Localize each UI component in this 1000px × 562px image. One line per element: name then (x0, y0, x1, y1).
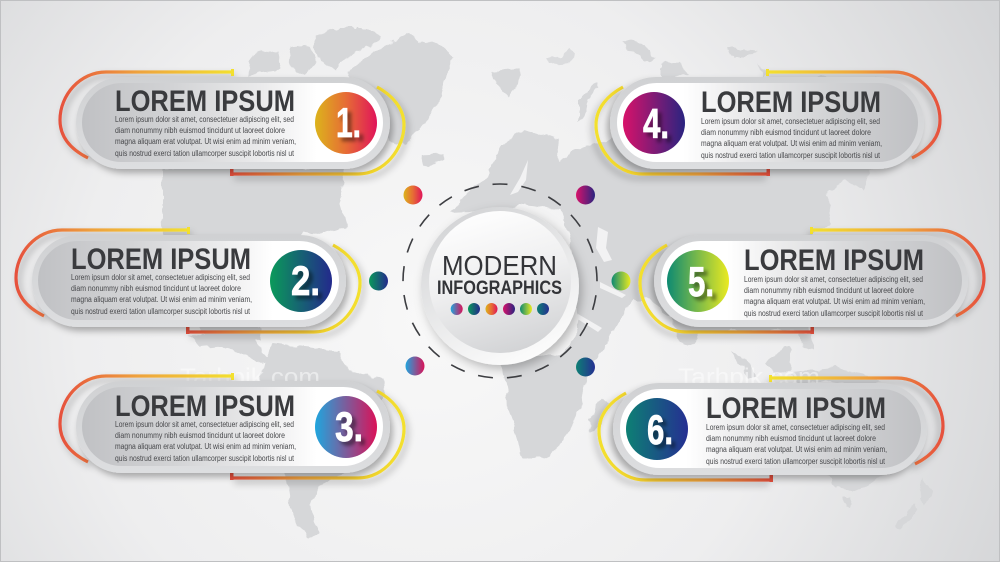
watermark right: Tarhpik.com (678, 364, 820, 391)
card 6 body text: magna aliquam erat volutpat. Ut wisi enim ad minim veniam, (706, 445, 887, 454)
map: africa (500, 300, 632, 460)
map: java and new guinea (790, 368, 880, 386)
card 4 body text: Lorem ipsum dolor sit amet, consectetuer adipiscing elit, sed (701, 117, 880, 126)
card 3 (60, 373, 404, 480)
card 2 (16, 227, 360, 334)
connector dots (369, 186, 630, 376)
world map (163, 28, 933, 537)
card 5 number badge: 5. (688, 258, 714, 305)
map: borneo (767, 346, 792, 374)
map: australia (800, 388, 905, 490)
map: central america (187, 333, 270, 362)
card 1 number badge (315, 92, 377, 154)
map: baltic sea (510, 160, 528, 195)
map: madagascar (588, 398, 607, 433)
map: arctic islands east (313, 28, 380, 72)
card 1 body text: magna aliquam erat volutpat. Ut wisi enim ad minim veniam, (115, 137, 296, 146)
central title: INFOGRAPHICS (437, 278, 562, 299)
card 4 body text: magna aliquam erat volutpat. Ut wisi enim ad minim veniam, (701, 139, 882, 148)
card 2 number badge: 2. (291, 257, 320, 304)
card 3 body text: Lorem ipsum dolor sit amet, consectetuer adipiscing elit, sed (115, 420, 294, 429)
card 5 body text: Lorem ipsum dolor sit amet, consectetuer adipiscing elit, sed (744, 275, 923, 284)
card 1 heading: LOREM IPSUM (115, 85, 295, 118)
card 2 body text (71, 273, 252, 316)
card 1 body text: diam nonummy nibh euismod tincidunt ut laoreet dolore (115, 126, 285, 135)
card 5 body text (744, 275, 925, 318)
watermark left: Tarhpik.com (180, 364, 320, 391)
card 4 heading: LOREM IPSUM (701, 86, 881, 119)
map: greenland (347, 36, 455, 145)
card 6 body text: Lorem ipsum dolor sit amet, consectetuer adipiscing elit, sed (706, 423, 885, 432)
map: novaya zemlya (578, 83, 600, 122)
card 3 number badge: 3. (335, 403, 363, 450)
map: caspian and black sea (555, 227, 612, 262)
map: new zealand (893, 478, 933, 530)
map: persian gulf and red sea (576, 282, 626, 332)
card 4 number badge: 4. (643, 100, 669, 147)
card 2 body text: magna aliquam erat volutpat. Ut wisi enim ad minim veniam, (71, 295, 252, 304)
card 5 (640, 227, 984, 334)
card 6 heading: LOREM IPSUM (706, 392, 886, 425)
card 3 body text: magna aliquam erat volutpat. Ut wisi enim ad minim veniam, (115, 442, 296, 451)
card 6 body text (706, 423, 887, 466)
card 3 heading: LOREM IPSUM (115, 390, 295, 423)
card 1 (60, 69, 404, 176)
card 5 body text: diam nonummy nibh euismod tincidunt ut laoreet dolore (744, 286, 914, 295)
card 1 body text: Lorem ipsum dolor sit amet, consectetuer adipiscing elit, sed (115, 115, 294, 124)
map lakes and seas (510, 160, 626, 332)
card 4 body text: diam nonummy nibh euismod tincidunt ut laoreet dolore (701, 128, 871, 137)
card 2 body text: Lorem ipsum dolor sit amet, consectetuer adipiscing elit, sed (71, 273, 250, 282)
card 1 body text: quis nostrud exerci tation ullamcorper suscipit lobortis nisl ut (115, 149, 295, 158)
card 2 body text: diam nonummy nibh euismod tincidunt ut laoreet dolore (71, 284, 241, 293)
card 5 body text: magna aliquam erat volutpat. Ut wisi enim ad minim veniam, (744, 297, 925, 306)
map: sumatra (730, 350, 757, 378)
card 4 number badge (623, 92, 685, 154)
card 6 body text: quis nostrud exerci tation ullamcorper suscipit lobortis nisl ut (706, 457, 886, 466)
map: south america (262, 343, 385, 537)
central title (437, 250, 562, 299)
card 6 body text: diam nonummy nibh euismod tincidunt ut laoreet dolore (706, 434, 876, 443)
card 4 body text (701, 117, 882, 160)
card 6 (599, 375, 943, 482)
map: arctic islands middle (288, 46, 318, 74)
card 5 number badge (667, 250, 729, 312)
card 6 number badge (626, 398, 688, 460)
card 1 body text (115, 115, 296, 158)
card 2 heading: LOREM IPSUM (71, 243, 251, 276)
map: europe and asia (450, 78, 905, 363)
map: iceland (423, 153, 445, 166)
card 5 body text: quis nostrud exerci tation ullamcorper suscipit lobortis nisl ut (744, 309, 924, 318)
card 3 body text: diam nonummy nibh euismod tincidunt ut laoreet dolore (115, 431, 285, 440)
card 3 body text: quis nostrud exerci tation ullamcorper suscipit lobortis nisl ut (115, 454, 295, 463)
card 3 body text (115, 420, 296, 463)
card 3 number badge (315, 396, 377, 458)
card 5 heading: LOREM IPSUM (744, 244, 924, 277)
map: svalbard (492, 68, 520, 96)
map: north america (163, 168, 347, 340)
central title: MODERN (442, 250, 557, 281)
map: arctic islands west (247, 50, 282, 74)
card 2 body text: quis nostrud exerci tation ullamcorper suscipit lobortis nisl ut (71, 307, 251, 316)
dashed ring (396, 177, 604, 385)
central disc (421, 207, 579, 365)
map: philippines (800, 333, 812, 350)
card 6 number badge: 6. (647, 406, 673, 453)
card 1 number badge: 1. (336, 99, 361, 146)
map: severnaya islands (623, 38, 768, 80)
card 4 body text: quis nostrud exerci tation ullamcorper suscipit lobortis nisl ut (701, 151, 881, 160)
colour dots row (451, 303, 549, 315)
card 4 (596, 69, 940, 176)
map: franz josef land (547, 48, 577, 66)
map: tasmania (842, 497, 852, 508)
card 2 number badge (270, 250, 332, 312)
